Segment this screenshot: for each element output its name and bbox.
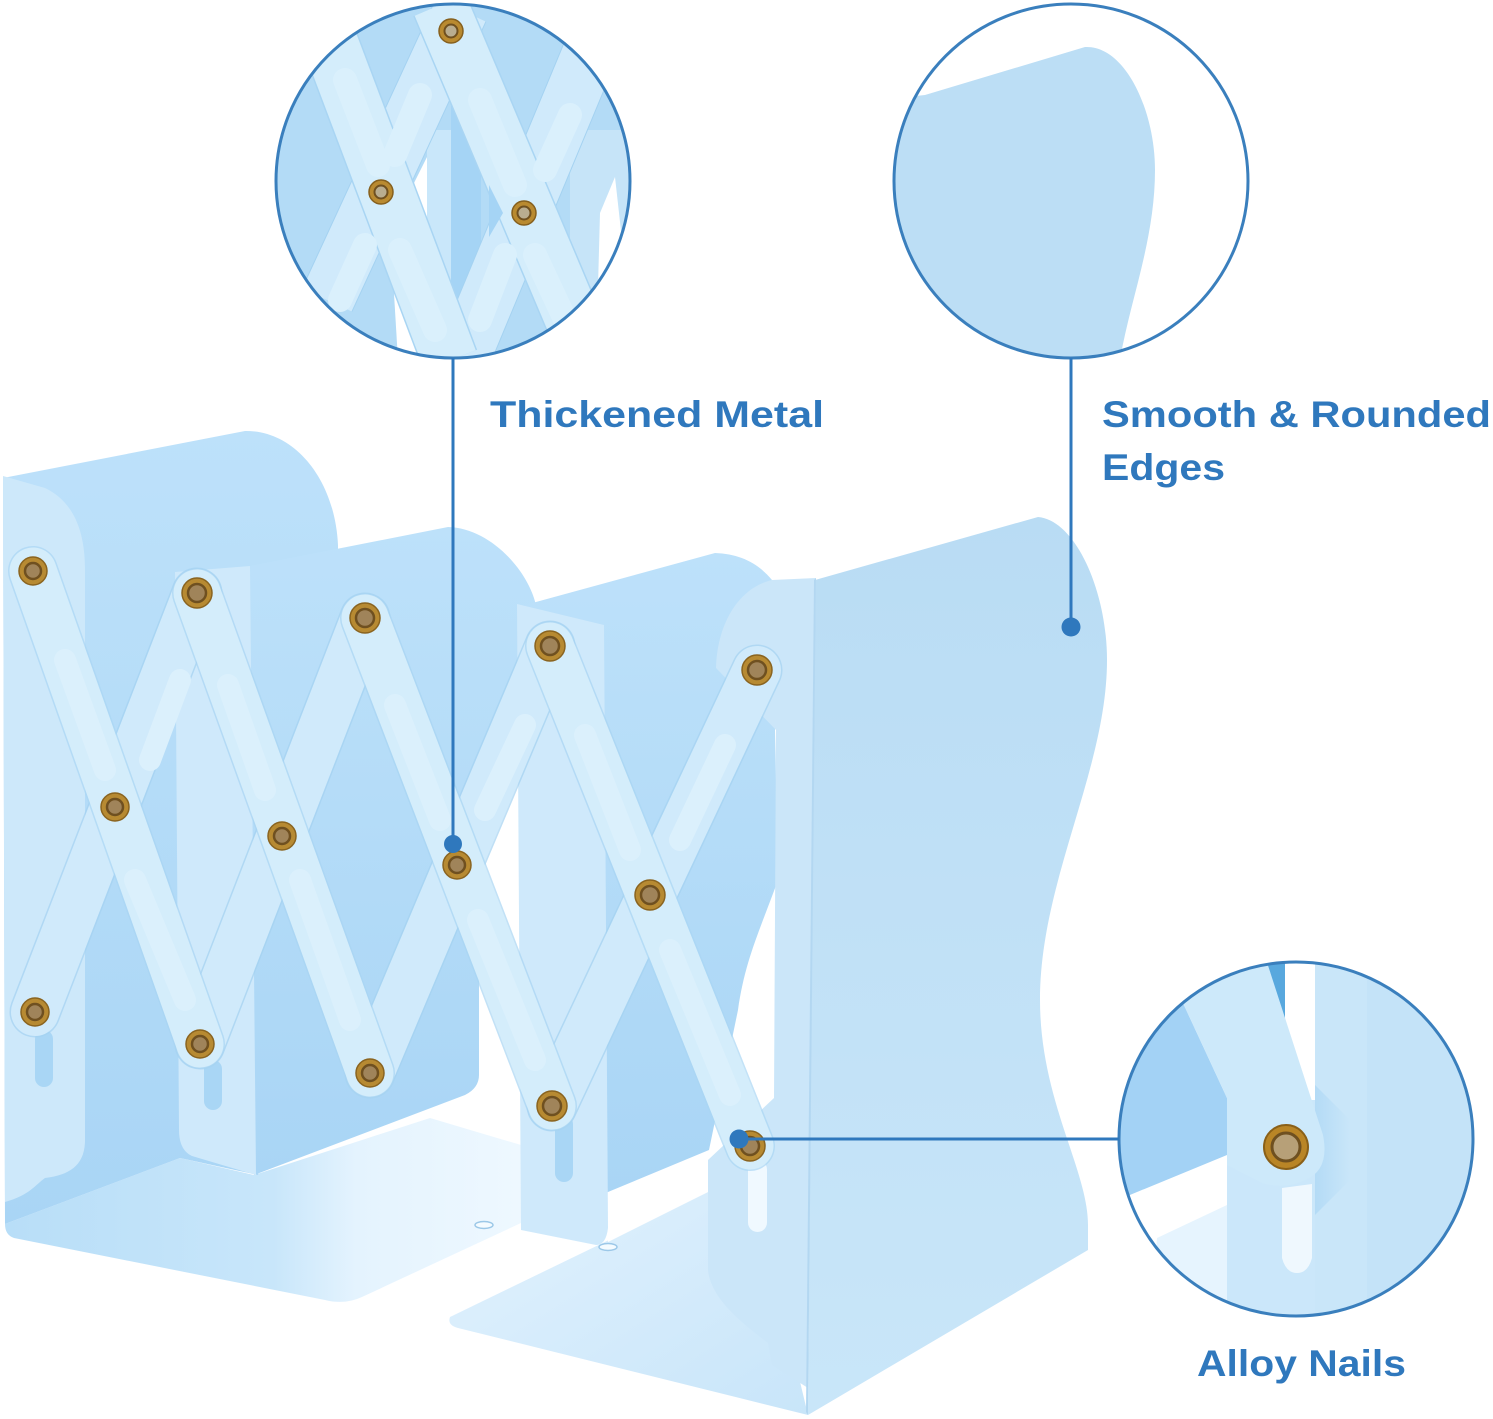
falling arms xyxy=(318,5,590,360)
falling arms xyxy=(33,571,750,1146)
front flange slot xyxy=(748,1160,767,1232)
white gaps xyxy=(414,157,427,216)
front bookend base xyxy=(449,1190,808,1415)
slot xyxy=(1282,1184,1312,1273)
label: alloy nails: Alloy Nails xyxy=(1197,1343,1406,1384)
flange xyxy=(1227,1100,1315,1330)
rivets in close-up xyxy=(369,19,536,225)
left bookend back plate xyxy=(3,431,338,1224)
third back plate xyxy=(525,553,778,1192)
callout circle: alloy nail close-up xyxy=(1118,960,1474,1318)
product: expandable bookends xyxy=(3,431,1107,1415)
label: smooth and rounded edges: Edges xyxy=(1102,447,1225,488)
rising arms xyxy=(327,0,620,360)
left flange slot xyxy=(35,1030,53,1087)
front main plate xyxy=(808,517,1107,1415)
embossed ribs xyxy=(65,660,730,1095)
label: smooth and rounded edges: Smooth & Rounded xyxy=(1102,394,1491,435)
callout circle: thickened metal close-up xyxy=(276,0,630,360)
left bookend flange xyxy=(3,476,85,1202)
small gap triangle xyxy=(489,185,503,237)
rivets xyxy=(19,557,772,1161)
back slit white floor xyxy=(608,1145,712,1242)
right plate xyxy=(1315,960,1367,1330)
shade beside arm xyxy=(1315,1085,1336,1215)
callout circle: rounded edge close-up xyxy=(880,4,1248,360)
middle flange slot xyxy=(204,1060,222,1110)
arm shadows xyxy=(35,593,757,1106)
leader line: thickened metal xyxy=(444,358,462,853)
vertical strips xyxy=(427,130,451,280)
left bookend base xyxy=(5,1118,521,1302)
front flange xyxy=(708,578,816,1388)
rivet xyxy=(1264,1125,1308,1169)
leader line: rounded edges xyxy=(1062,358,1080,636)
light base xyxy=(1156,1205,1227,1300)
falling arm shadows xyxy=(33,571,750,1146)
ribs xyxy=(340,80,570,330)
middle bookend flange xyxy=(175,566,256,1175)
third flange slot xyxy=(555,1115,573,1182)
base screw holes xyxy=(475,1222,617,1250)
leader line: alloy nails xyxy=(730,1130,1119,1148)
arm xyxy=(1184,966,1324,1174)
dark top strip xyxy=(1268,964,1285,1018)
third flange xyxy=(517,604,608,1245)
middle bookend back plate xyxy=(250,527,536,1175)
label: thickened metal: Thickened Metal xyxy=(490,394,824,435)
rising arms xyxy=(35,593,757,1106)
fold shadow xyxy=(806,578,816,1415)
dark back plate xyxy=(1120,1004,1227,1195)
scissor arms xyxy=(33,571,757,1146)
